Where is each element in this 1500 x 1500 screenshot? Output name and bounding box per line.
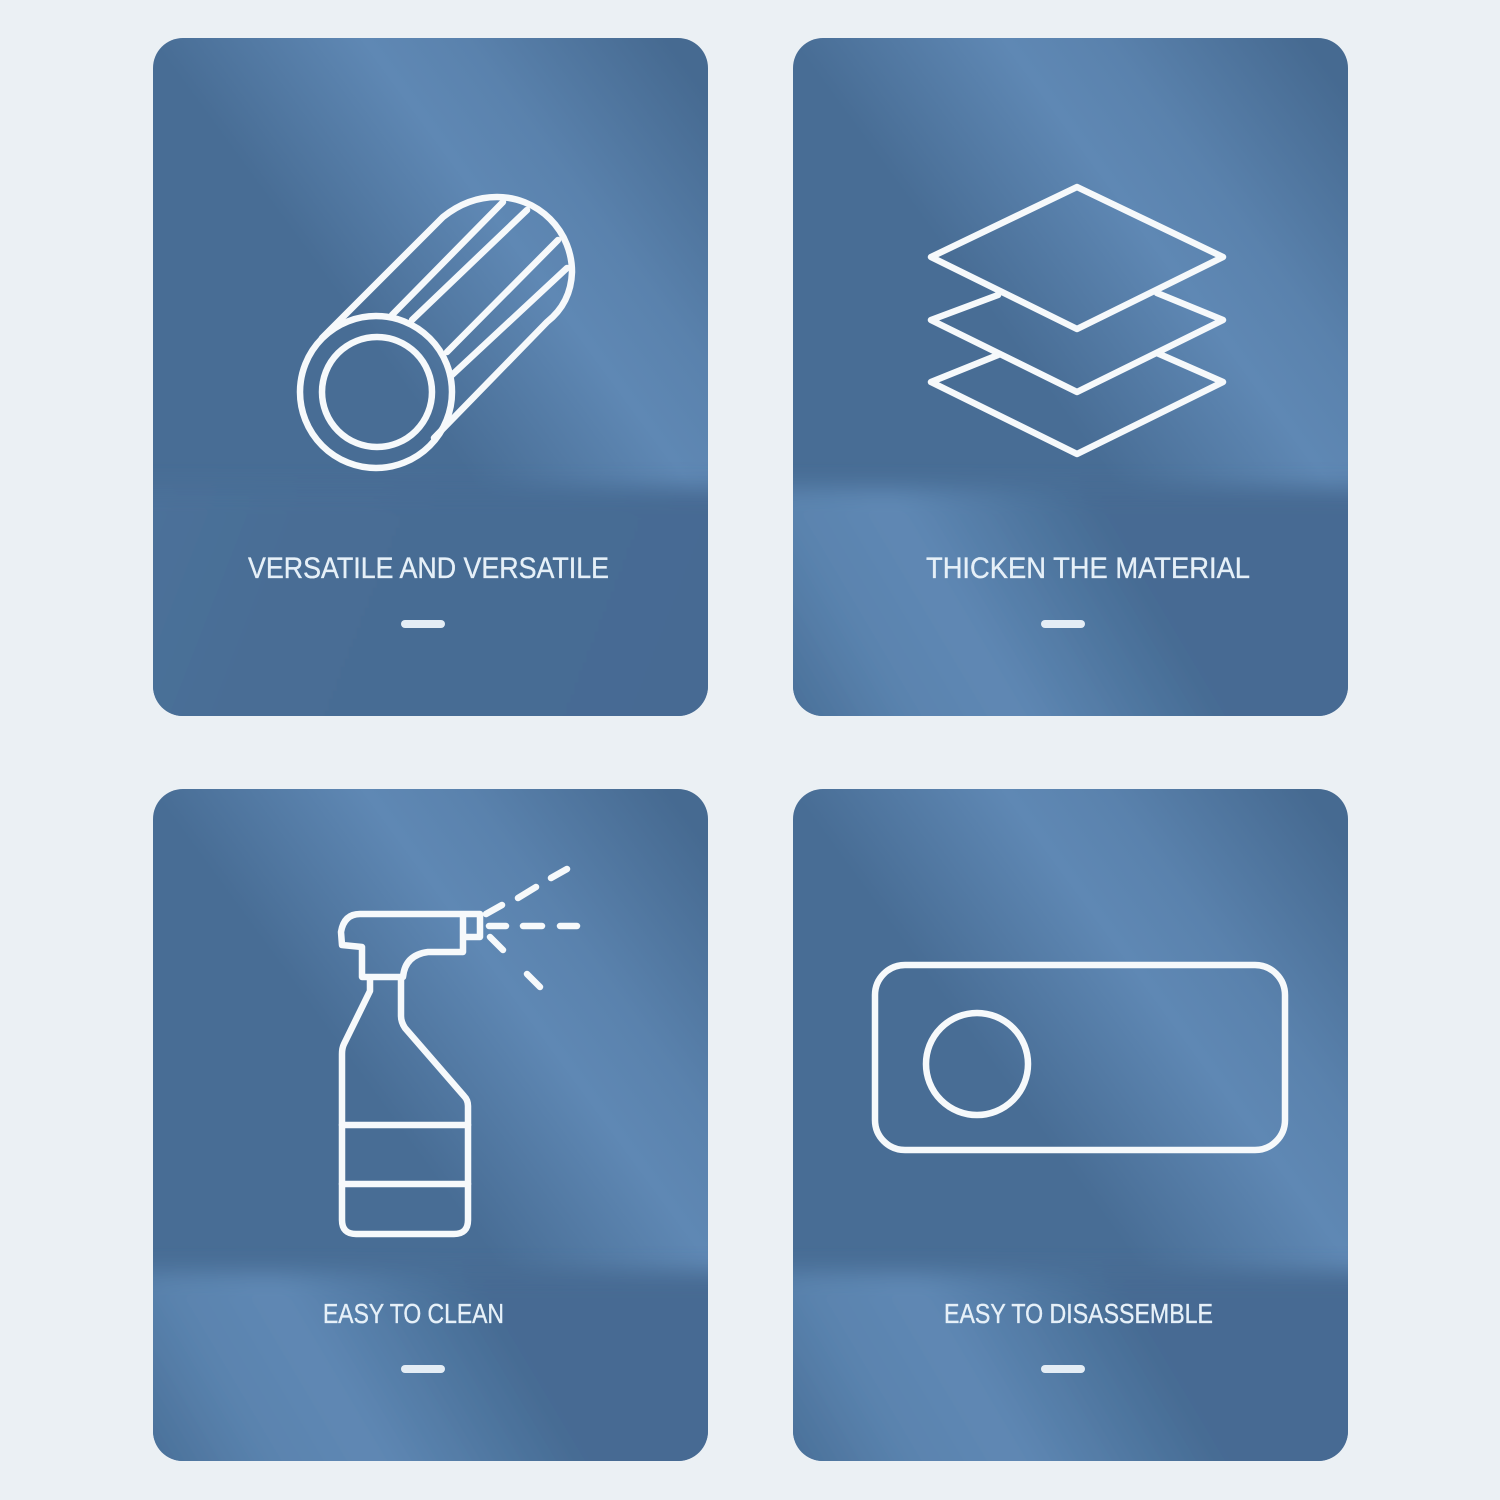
- dash marker: [1041, 620, 1085, 628]
- panel: easy to disassemble: [793, 789, 1348, 1461]
- icon: foam roller cylinder: [300, 197, 572, 468]
- panel: easy to clean: [153, 789, 708, 1461]
- icon: stacked layers: [931, 187, 1223, 454]
- dash marker: [401, 620, 445, 628]
- heading: easy to clean: EASY TO CLEAN: [323, 1298, 504, 1329]
- card background: disassemble: [793, 789, 1348, 1461]
- icon: rounded filter panel: [875, 965, 1285, 1150]
- heading: versatile and versatile: VERSATILE AND VERSATILE: [248, 552, 609, 585]
- card background: clean: [153, 789, 708, 1461]
- card background: versatile: [153, 38, 708, 716]
- icon: spray bottle: [341, 869, 577, 1234]
- panel: versatile and versatile: [153, 38, 708, 716]
- heading: easy to disassemble: EASY TO DISASSEMBLE: [944, 1298, 1213, 1329]
- dash marker: [401, 1365, 445, 1373]
- heading: thicken the material: THICKEN THE MATERIAL: [926, 552, 1250, 585]
- panel: thicken the material: [793, 38, 1348, 716]
- card background: thicken: [793, 38, 1348, 716]
- dash marker: [1041, 1365, 1085, 1373]
